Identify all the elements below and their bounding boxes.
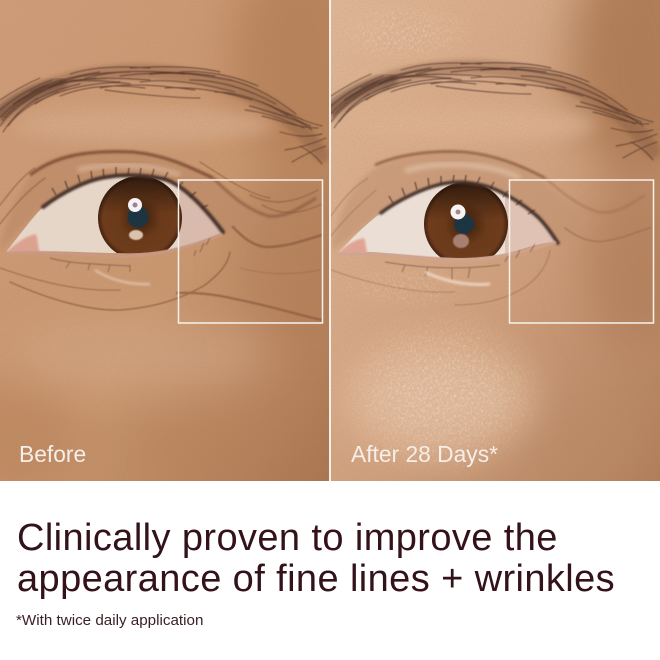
lower reflection [453,234,469,248]
lower lid [338,242,556,260]
eye [336,175,565,280]
upper eyelid [331,152,645,250]
eyebrow [0,67,326,164]
eyebrow [331,63,657,160]
upper lashes [43,175,223,232]
pale lower-lid highlights [95,270,150,284]
pink sclera corner [179,188,222,247]
catchlight [450,204,466,220]
label: after 28 days: After 28 Days* [351,441,498,467]
skin texture [331,0,565,453]
pupil [128,206,148,228]
pupil [454,214,474,234]
divider between photos [329,0,331,481]
iris [424,182,508,258]
eye [4,167,228,272]
bright skin specks [331,0,550,481]
panel: after photo [331,0,660,481]
wrinkles [0,162,322,320]
iris [98,176,182,260]
softened wrinkles [331,178,650,305]
upper eyelid [0,151,316,250]
panel: before photo [0,0,329,481]
heading line two: appearance of fine lines + wrinkles [17,558,615,600]
lower lid [6,234,222,256]
heading line one: Clinically proven to improve the [17,517,558,559]
pale lower-lid highlights [425,272,490,284]
before and after photo panels [0,0,660,481]
iris top shading [426,183,506,214]
highlight box: after [510,180,654,323]
lower reflection [129,230,143,240]
pink sclera corner [505,196,554,254]
caruncle [338,237,368,253]
catchlight [128,198,142,212]
skin texture [0,6,234,348]
highlight box: before [178,180,322,323]
footnote: *With twice daily application [16,612,203,629]
caruncle [6,234,40,252]
label: before: Before [19,441,86,467]
upper lashes [381,182,558,243]
iris top shading [100,176,180,208]
